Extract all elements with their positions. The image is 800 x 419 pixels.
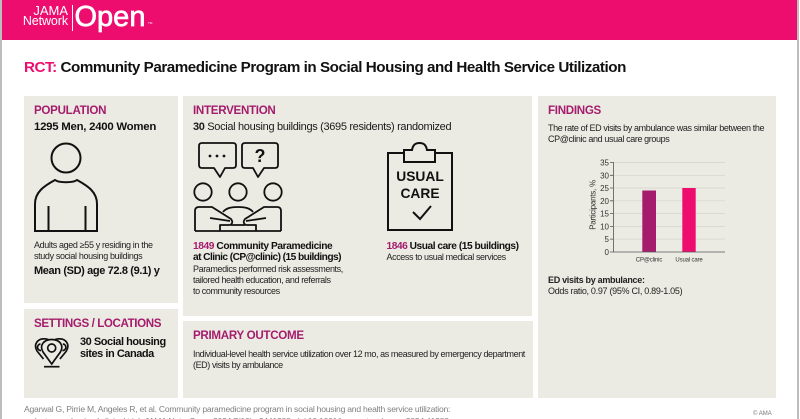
title: RCT: Community Paramedicine Program in Social Housing and Health Service Utilization [24, 59, 626, 76]
bar chart: 15 [600, 210, 610, 219]
odds ratio [548, 275, 682, 296]
panel: population [24, 96, 178, 303]
bar chart: Participants, % [588, 180, 598, 230]
CP@clinic description: to community resources [193, 286, 280, 296]
primary outcome description [193, 349, 526, 370]
population description: Adults aged ≥55 y residing in the [34, 240, 153, 250]
panel: settings / locations [24, 309, 178, 398]
population counts: 1295 Men, 2400 Women [34, 121, 156, 133]
heading: primary outcome: PRIMARY OUTCOME [193, 329, 304, 342]
bar chart: 5 [605, 235, 610, 244]
population description: study social housing buildings [34, 251, 142, 261]
bar chart: Usual care [675, 258, 703, 264]
CP@clinic description: Paramedics performed risk assessments, [193, 264, 343, 274]
bar chart: 30 [600, 171, 610, 180]
icon: usual care clipboard [387, 142, 453, 231]
heading: settings: SETTINGS / LOCATIONS [34, 317, 161, 330]
population description [34, 240, 153, 261]
bar: usual care [682, 188, 696, 252]
bar chart [588, 158, 725, 264]
text: CP@clinic group [193, 241, 343, 296]
mean age: Mean (SD) age 72.8 (9.1) y [34, 265, 160, 277]
icon: usual care clipboard: USUAL [396, 169, 444, 184]
panel: findings [538, 96, 776, 398]
page edge lines [0, 0, 2, 419]
bar chart: 35 [600, 158, 610, 168]
CP@clinic description [193, 264, 343, 296]
CP@clinic group heading [193, 241, 341, 263]
bar chart: 25 [600, 184, 610, 193]
logo: JAMA Network Open: Open [74, 0, 145, 32]
CP@clinic group heading: 1849 Community Paramedicine [193, 241, 332, 252]
bar chart: 10 [600, 222, 610, 231]
usual care description: Access to usual medical services [386, 252, 506, 262]
logo: JAMA Network Open: TM [148, 21, 152, 25]
primary outcome description: Individual-level health service utilization over 12 mo, as measured by emergency department [193, 349, 525, 359]
settings text [80, 336, 166, 360]
findings summary: CP@clinic and usual care groups [548, 134, 669, 144]
randomization summary: 30 Social housing buildings (3695 residents) randomized [193, 121, 451, 133]
logo: JAMA Network Open: JAMA [33, 3, 68, 18]
icon: usual care clipboard: CARE [400, 186, 440, 201]
CP@clinic group heading: at Clinic (CP@clinic) (15 buildings) [193, 252, 341, 263]
panel: primary outcome [183, 321, 533, 398]
usual care heading: 1846 Usual care (15 buildings) [386, 241, 518, 252]
citation [24, 404, 450, 419]
findings summary: The rate of ED visits by ambulance was similar between the [548, 123, 764, 133]
citation: Agarwal G, Pirrie M, Angeles R, et al. Community paramedicine program in social housing and health service utilization: [24, 404, 450, 414]
CP@clinic description: tailored health education, and referrals [193, 274, 331, 284]
panel: intervention [183, 96, 532, 316]
icon: group conversation: ? [254, 146, 266, 166]
settings text: 30 Social housing [80, 336, 166, 348]
icon: map pins [34, 338, 69, 368]
heading: intervention: INTERVENTION [193, 104, 276, 117]
icon: person [34, 142, 98, 232]
settings text: sites in Canada [80, 348, 154, 360]
bar chart: 0 [605, 248, 610, 257]
icon: group conversation [193, 142, 283, 232]
odds ratio: Odds ratio, 0.97 (95% CI, 0.89-1.05) [548, 286, 682, 296]
text: usual care group [386, 241, 518, 262]
bar chart: CP@clinic [636, 258, 662, 264]
heading: findings: FINDINGS [548, 104, 601, 117]
header band [2, 0, 797, 40]
odds ratio: ED visits by ambulance: [548, 275, 645, 285]
bar: CP@clinic [642, 190, 656, 252]
logo: JAMA Network Open: Network [23, 14, 68, 28]
bar chart: 20 [600, 197, 610, 206]
findings summary [548, 123, 764, 144]
logo: JAMA Network Open [23, 0, 152, 32]
heading: population: POPULATION [34, 104, 106, 117]
copyright: © AMA [753, 411, 772, 417]
primary outcome description: (ED) visits by ambulance [193, 360, 283, 370]
